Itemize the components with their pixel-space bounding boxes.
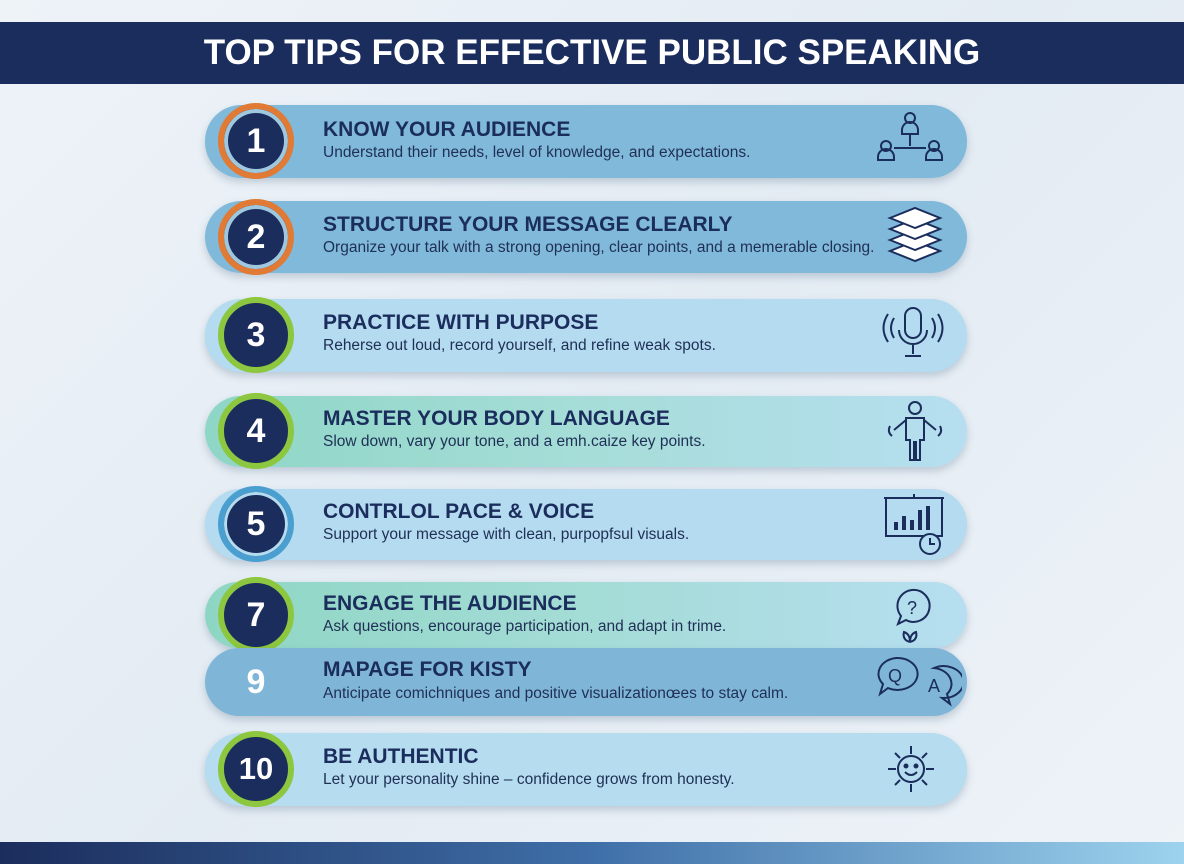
tip 7 (205, 582, 967, 648)
tip 3 (205, 299, 967, 372)
icon: question bubble (896, 588, 931, 643)
icon: Q&A bubbles (878, 657, 962, 706)
title bar (0, 22, 1184, 84)
text: 9 (247, 663, 265, 701)
text: STRUCTURE YOUR MESSAGE CLEARLY (323, 213, 733, 236)
text: 7 (247, 596, 265, 634)
tip 4 (205, 396, 967, 467)
text: BE AUTHENTIC (323, 745, 479, 768)
text: CONTRLOL PACE & VOICE (323, 500, 594, 523)
text: 2 (247, 218, 265, 256)
tip 2 (205, 201, 967, 273)
icon: people network (877, 112, 943, 161)
text: 5 (247, 505, 265, 543)
icon: person (888, 401, 942, 461)
text: Ask questions, encourage participation, and adapt in trime. (323, 618, 726, 635)
text: Anticipate comichniques and positive visualizationœes to stay calm. (323, 685, 788, 702)
tip 1 (205, 105, 967, 178)
text: Reherse out loud, record yourself, and refine weak spots. (323, 337, 716, 354)
text: 10 (239, 751, 273, 786)
icon: question bubble: ? (907, 598, 917, 618)
tip 9 (205, 648, 967, 716)
text: ENGAGE THE AUDIENCE (323, 592, 577, 615)
tip 10 (205, 733, 967, 806)
text: Support your message with clean, purpopfsul visuals. (323, 526, 689, 543)
text: KNOW YOUR AUDIENCE (323, 118, 570, 141)
text: 3 (247, 316, 265, 354)
text: Let your personality shine – confidence grows from honesty. (323, 771, 735, 788)
text: Slow down, vary your tone, and a emh.caize key points. (323, 433, 706, 450)
text: Understand their needs, level of knowledge, and expectations. (323, 144, 750, 161)
title bar: TOP TIPS FOR EFFECTIVE PUBLIC SPEAKING (204, 33, 980, 72)
text: MASTER YOUR BODY LANGUAGE (323, 407, 670, 430)
icon: layers (888, 206, 942, 262)
text: Organize your talk with a strong opening, clear points, and a memerable closing. (323, 239, 874, 256)
text: 1 (247, 122, 265, 160)
text: 4 (247, 412, 265, 450)
icon: smiling sun (888, 746, 934, 792)
icon: Q&A bubbles: Q (888, 666, 902, 686)
icon: microphone (882, 307, 944, 357)
icon: presentation board (884, 494, 944, 555)
icon: Q&A bubbles: A (928, 676, 940, 696)
bottom bar (0, 842, 1184, 864)
tip 5 (205, 489, 967, 560)
text: PRACTICE WITH PURPOSE (323, 311, 598, 334)
text: MAPAGE FOR KISTY (323, 658, 531, 681)
